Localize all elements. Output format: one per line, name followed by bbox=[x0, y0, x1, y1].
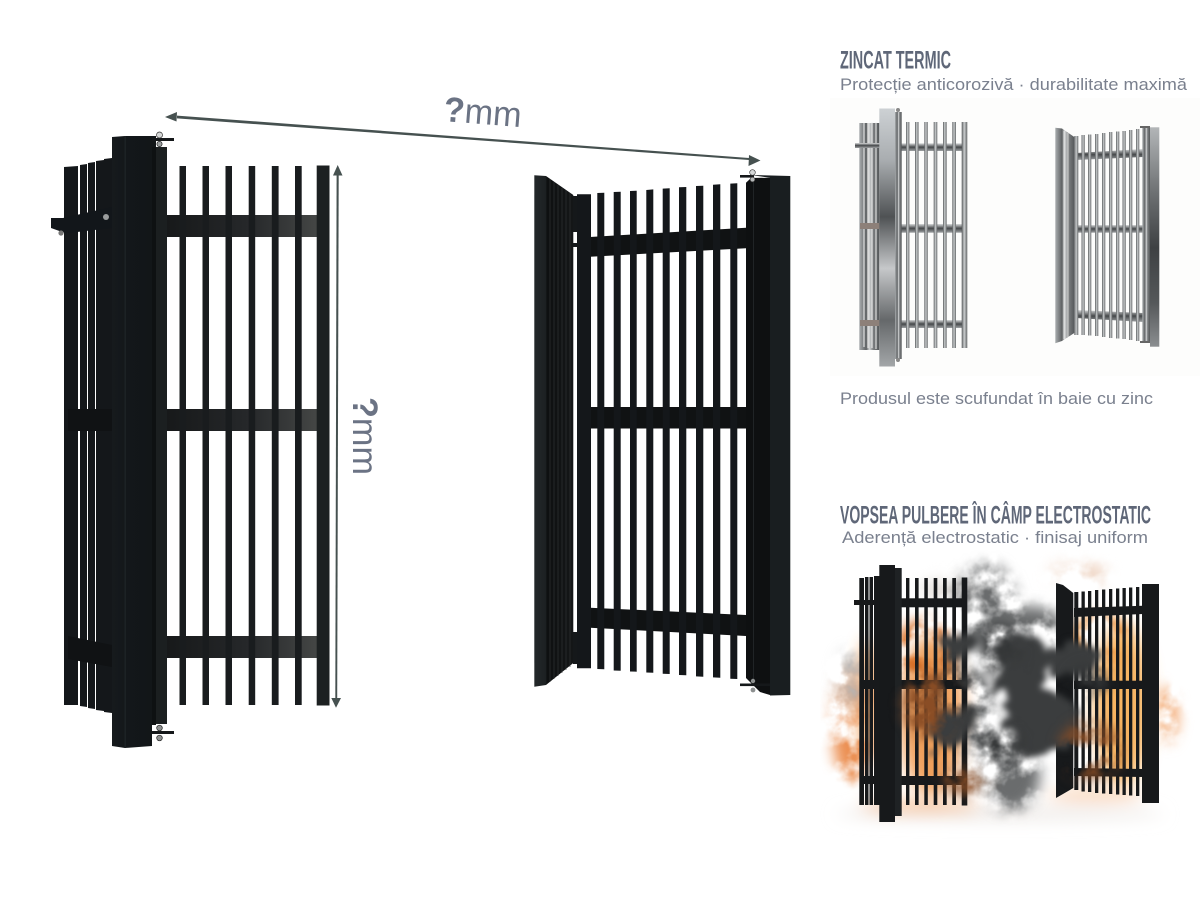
leaf frame and pickets bbox=[577, 183, 737, 679]
bottom hinge pin bbox=[152, 725, 174, 741]
orange glow behind gates bbox=[835, 625, 1165, 820]
rust tint in smoke bbox=[904, 671, 1120, 794]
image: galvanised gate pair bbox=[830, 98, 1200, 376]
right leaf bbox=[1056, 583, 1159, 803]
product: right gate leaf with folded panel bbox=[534, 170, 790, 695]
hinges between leaves bbox=[573, 196, 577, 664]
height dimension arrow bbox=[331, 165, 342, 708]
main post bbox=[746, 175, 790, 696]
horizontal rails bbox=[590, 228, 746, 636]
image: powder-coated gate pair in smoke and fire bbox=[832, 561, 1178, 822]
width label: ?mm bbox=[442, 90, 523, 135]
folded pickets bbox=[64, 158, 112, 713]
folded panel bbox=[534, 175, 573, 687]
dark smoke cloud bbox=[926, 628, 1098, 754]
main post bbox=[112, 136, 167, 748]
subtitle: electrostatic adhesion: Aderență electrostatic · finisaj uniform bbox=[842, 528, 1148, 547]
smoke wisps over gates bbox=[934, 624, 1110, 761]
pale upper and lower smoke bbox=[836, 563, 1064, 811]
horizontal rails bbox=[167, 215, 317, 658]
heading: hot-dip galvanising: ZINCAT TERMIC bbox=[840, 46, 951, 74]
bottom hinge pin bbox=[740, 679, 770, 692]
outer flame wisps bbox=[832, 561, 1178, 785]
width dimension arrow bbox=[165, 112, 760, 166]
image backdrop bbox=[830, 98, 1200, 376]
subtitle: corrosion protection: Protecție anticorozivă · durabilitate maximă bbox=[840, 75, 1188, 94]
caption: zinc bath: Produsul este scufundat în baie cu zinc bbox=[840, 389, 1154, 408]
top hinge pin bbox=[740, 170, 755, 182]
top hinge pin bbox=[152, 132, 174, 147]
left leaf bbox=[854, 565, 967, 822]
product: left gate leaf with folded panel bbox=[51, 132, 330, 748]
galvanised right leaf bbox=[1055, 126, 1159, 347]
folded rails bbox=[68, 409, 112, 667]
height label: ? mm bbox=[345, 397, 384, 475]
hinge arm bbox=[51, 207, 112, 236]
galvanised left leaf bbox=[855, 108, 967, 366]
vertical pickets bbox=[180, 166, 330, 706]
